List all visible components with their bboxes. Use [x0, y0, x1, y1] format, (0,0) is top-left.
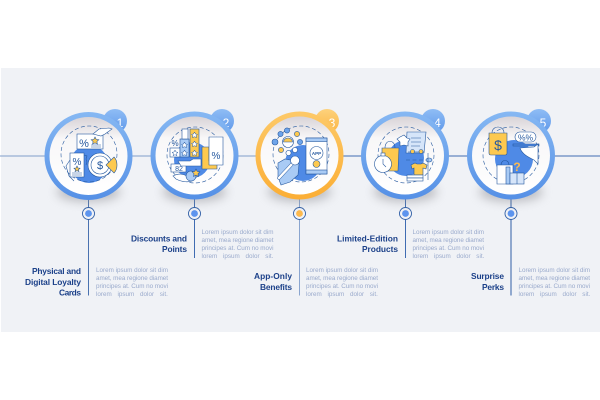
- step 4: limited-edition products: [337, 109, 485, 260]
- step 3: app-only benefits: [254, 109, 378, 298]
- title 1: [25, 266, 81, 298]
- step 2: discounts and points: [131, 109, 274, 260]
- body text 2: amet, mea regione diamet: [202, 237, 274, 244]
- badge 3: [315, 109, 339, 133]
- body text 5: Lorem ipsum dolor sit dim: [518, 267, 590, 274]
- connector line 1: [88, 195, 90, 296]
- node 4: [400, 208, 412, 220]
- step 5: surprise perks: [467, 109, 591, 298]
- body text 1: lorem ipsum dolor sit.: [96, 291, 168, 298]
- title 2: Points: [162, 244, 187, 254]
- connector line 4: [404, 195, 406, 258]
- connector line 2: [194, 195, 196, 258]
- icon: loyalty cards: $: [97, 160, 103, 172]
- icon: limited-edition shopping: [374, 127, 434, 183]
- badge 3: 3: [329, 116, 336, 130]
- body text 3: lorem ipsum dolor sit.: [306, 291, 378, 298]
- node 1: [82, 208, 94, 220]
- body text 1: amet, mea regione diamet: [96, 275, 168, 282]
- badge 1: [103, 109, 127, 133]
- title 3: [254, 271, 292, 292]
- body text 4: amet, mea regione diamet: [412, 237, 484, 244]
- icon: surprise perks: ?: [513, 160, 521, 174]
- step 1: physical and digital loyalty cards: [25, 109, 168, 298]
- node 2: [188, 208, 200, 220]
- shadow 2: [162, 182, 226, 202]
- shadow 1: [56, 182, 120, 202]
- badge 2: [210, 109, 234, 133]
- node 5: [505, 208, 517, 220]
- body text 1: principes at. Cum no movi: [96, 283, 168, 290]
- ring 4: [361, 112, 449, 200]
- body text 4: [412, 229, 485, 260]
- node 3: [294, 208, 306, 220]
- shadow 3: [268, 182, 332, 202]
- ring 5: [467, 112, 555, 200]
- body text 5: lorem ipsum dolor sit.: [518, 291, 591, 298]
- icon: discount stars and coupon: %: [171, 139, 179, 148]
- title 3: App-Only: [254, 271, 292, 281]
- title 1: Cards: [59, 288, 81, 298]
- title 4: [337, 234, 398, 254]
- badge 5: [527, 109, 551, 133]
- background panel: [1, 68, 600, 332]
- icon: surprise perks: [483, 127, 539, 184]
- icon: discount stars and coupon: %: [212, 151, 221, 162]
- body text 4: Lorem ipsum dolor sit dim: [412, 229, 484, 236]
- body text 1: [96, 267, 168, 298]
- connector line 5: [510, 195, 512, 296]
- title 4: Products: [362, 244, 398, 254]
- body text 2: principes at. Cum no movi: [202, 245, 274, 252]
- badge 2: 2: [223, 116, 230, 130]
- body text 2: Lorem ipsum dolor sit dim: [202, 229, 274, 236]
- icon: app and key: APP: [312, 151, 321, 156]
- body text 2: lorem ipsum dolor sit.: [202, 253, 274, 260]
- icon: surprise perks: $: [494, 137, 502, 153]
- title 5: Surprise: [471, 271, 504, 281]
- icon: loyalty cards: [61, 126, 117, 183]
- title 5: [471, 271, 504, 292]
- badge 5: 5: [540, 116, 547, 130]
- connector line 3: [298, 195, 300, 296]
- body text 5: [518, 267, 591, 298]
- title 5: Perks: [482, 282, 504, 292]
- icon: discount stars and coupon: [167, 127, 223, 183]
- body text 3: amet, mea regione diamet: [306, 275, 378, 282]
- body text 4: lorem ipsum dolor sit.: [412, 253, 485, 260]
- title 3: Benefits: [260, 282, 292, 292]
- body text 3: Lorem ipsum dolor sit dim: [306, 267, 378, 274]
- title 1: Digital Loyalty: [25, 277, 81, 287]
- body text 1: Lorem ipsum dolor sit dim: [96, 267, 168, 274]
- shadow 5: [479, 182, 543, 202]
- horizontal connector line: [0, 155, 600, 157]
- badge 1: 1: [117, 116, 124, 130]
- body text 5: principes at. Cum no movi: [518, 283, 590, 290]
- icon: app and key: [272, 126, 329, 185]
- title 1: Physical and: [32, 266, 81, 276]
- body text 4: principes at. Cum no movi: [412, 245, 484, 252]
- body text 3: principes at. Cum no movi: [306, 283, 378, 290]
- ring 3: [256, 112, 344, 200]
- badge 4: [421, 109, 445, 133]
- ring 2: [150, 112, 238, 200]
- title 2: Discounts and: [131, 234, 187, 244]
- icon: loyalty cards: %: [73, 157, 82, 168]
- icon: discount stars and coupon: 82: [175, 166, 183, 173]
- icon: surprise perks: %%: [518, 132, 533, 142]
- ring 1: [44, 112, 132, 200]
- body text 2: [202, 229, 274, 260]
- body text 5: amet, mea regione diamet: [518, 275, 590, 282]
- icon: loyalty cards: %: [79, 138, 89, 150]
- shadow 4: [374, 182, 438, 202]
- title 2: [131, 234, 187, 254]
- badge 4: 4: [434, 116, 441, 130]
- body text 3: [306, 267, 378, 298]
- title 4: Limited-Edition: [337, 234, 398, 244]
